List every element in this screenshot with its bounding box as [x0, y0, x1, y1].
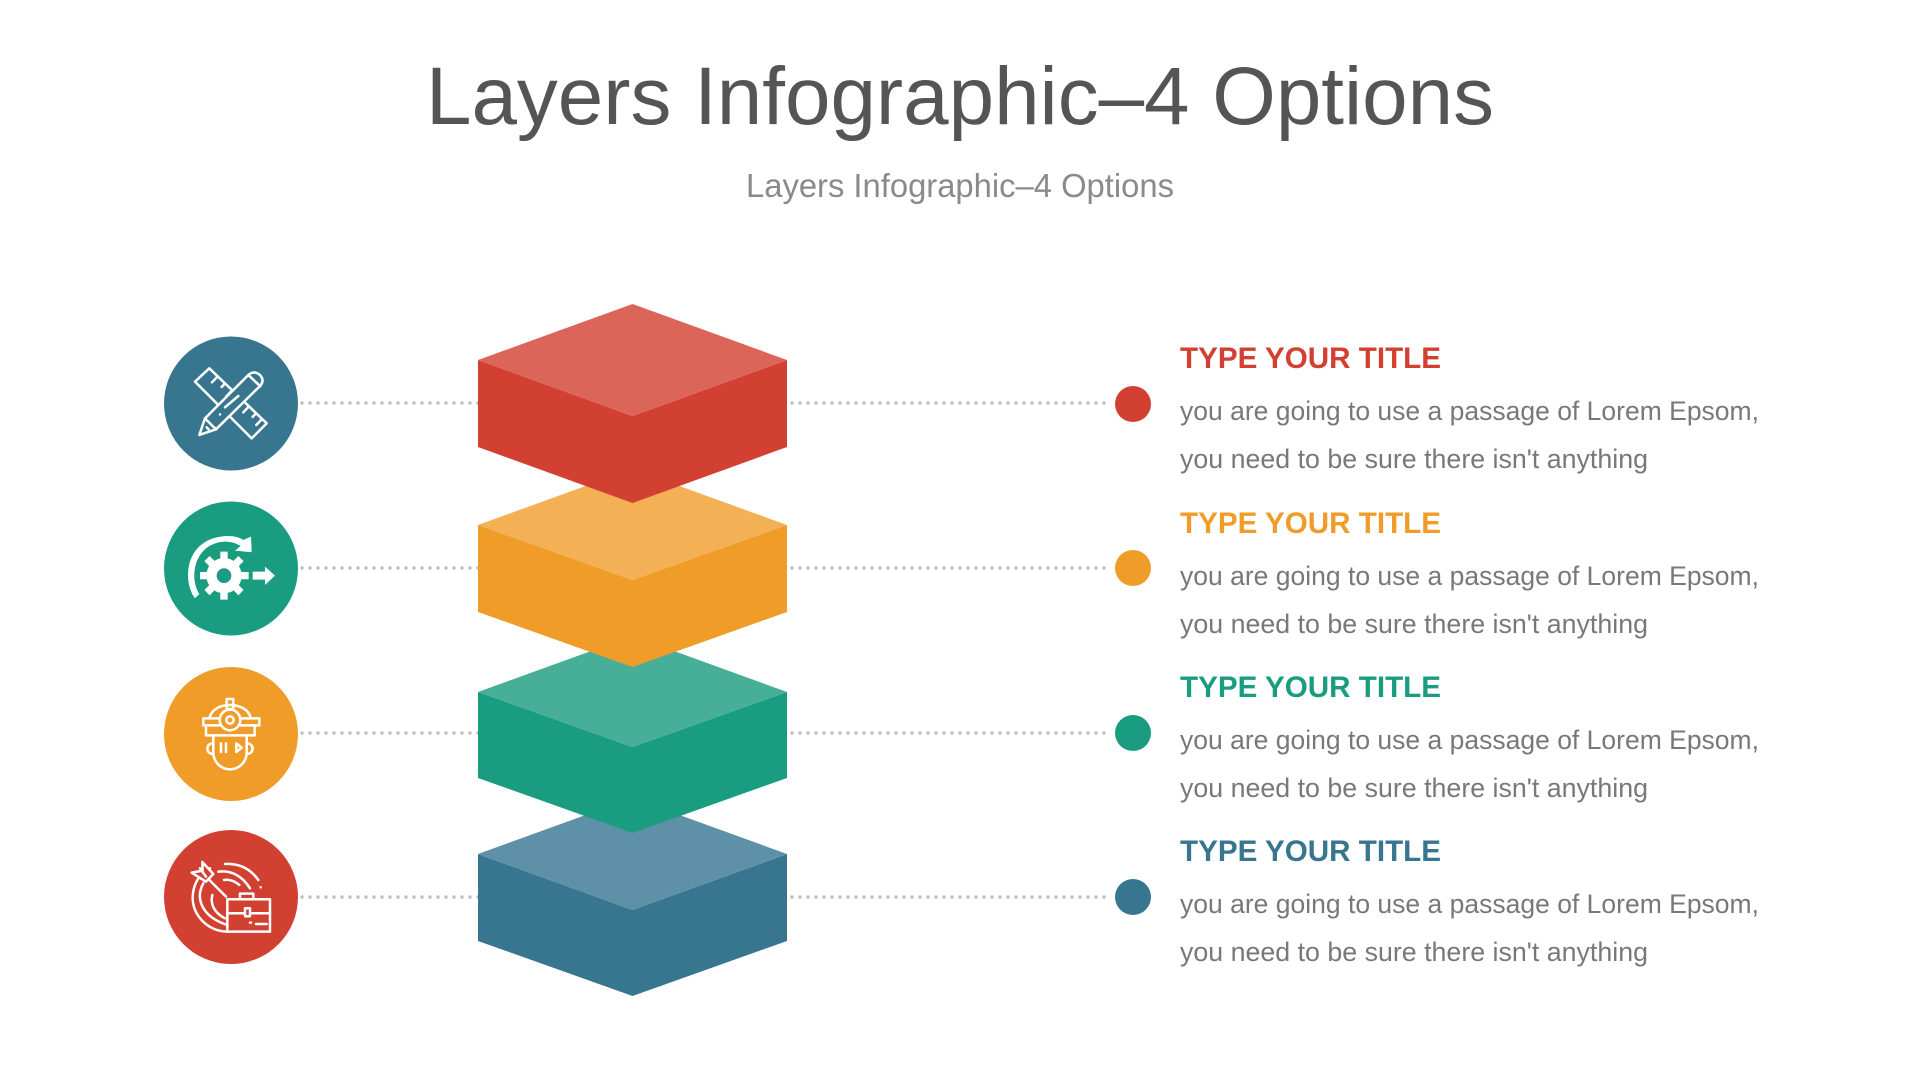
icon: ruler and pencil — [164, 336, 298, 470]
option 1 marker — [1115, 386, 1151, 422]
layer 4: blue — [478, 798, 787, 996]
icon: target and briefcase — [164, 830, 298, 964]
option 2 marker — [1115, 550, 1151, 586]
title: Layers Infographic–4 Options — [426, 51, 1494, 142]
subtitle: Layers Infographic–4 Options — [746, 167, 1174, 204]
option 4 text: you need to be sure there isn't anything — [1180, 937, 1648, 967]
option 3 text: you are going to use a passage of Lorem Epsom, — [1180, 725, 1759, 755]
option 4 marker — [1115, 879, 1151, 915]
icon: gear with arrows — [164, 502, 298, 636]
option 2 text: you are going to use a passage of Lorem Epsom, — [1180, 561, 1759, 591]
icon: miner with helmet lamp — [164, 667, 298, 801]
layer stack — [478, 304, 787, 996]
option 4 text — [1180, 835, 1759, 967]
option 4 text: TYPE YOUR TITLE — [1180, 835, 1441, 868]
layer 1: red — [478, 304, 787, 503]
option 3 text: TYPE YOUR TITLE — [1180, 671, 1441, 704]
option 1 text: you are going to use a passage of Lorem Epsom, — [1180, 396, 1759, 426]
option 3 marker — [1115, 715, 1151, 751]
option 2 text: TYPE YOUR TITLE — [1180, 507, 1441, 540]
option 2 text — [1180, 507, 1759, 639]
option 1 text: you need to be sure there isn't anything — [1180, 444, 1648, 474]
connector lines — [302, 403, 1110, 897]
option 1 text: TYPE YOUR TITLE — [1180, 342, 1441, 375]
option 1 text — [1180, 342, 1759, 474]
option 3 text: you need to be sure there isn't anything — [1180, 773, 1648, 803]
option 2 text: you need to be sure there isn't anything — [1180, 609, 1648, 639]
layer 3: green — [478, 636, 787, 833]
option 4 text: you are going to use a passage of Lorem Epsom, — [1180, 889, 1759, 919]
option 3 text — [1180, 671, 1759, 803]
layer 2: orange — [478, 469, 787, 667]
